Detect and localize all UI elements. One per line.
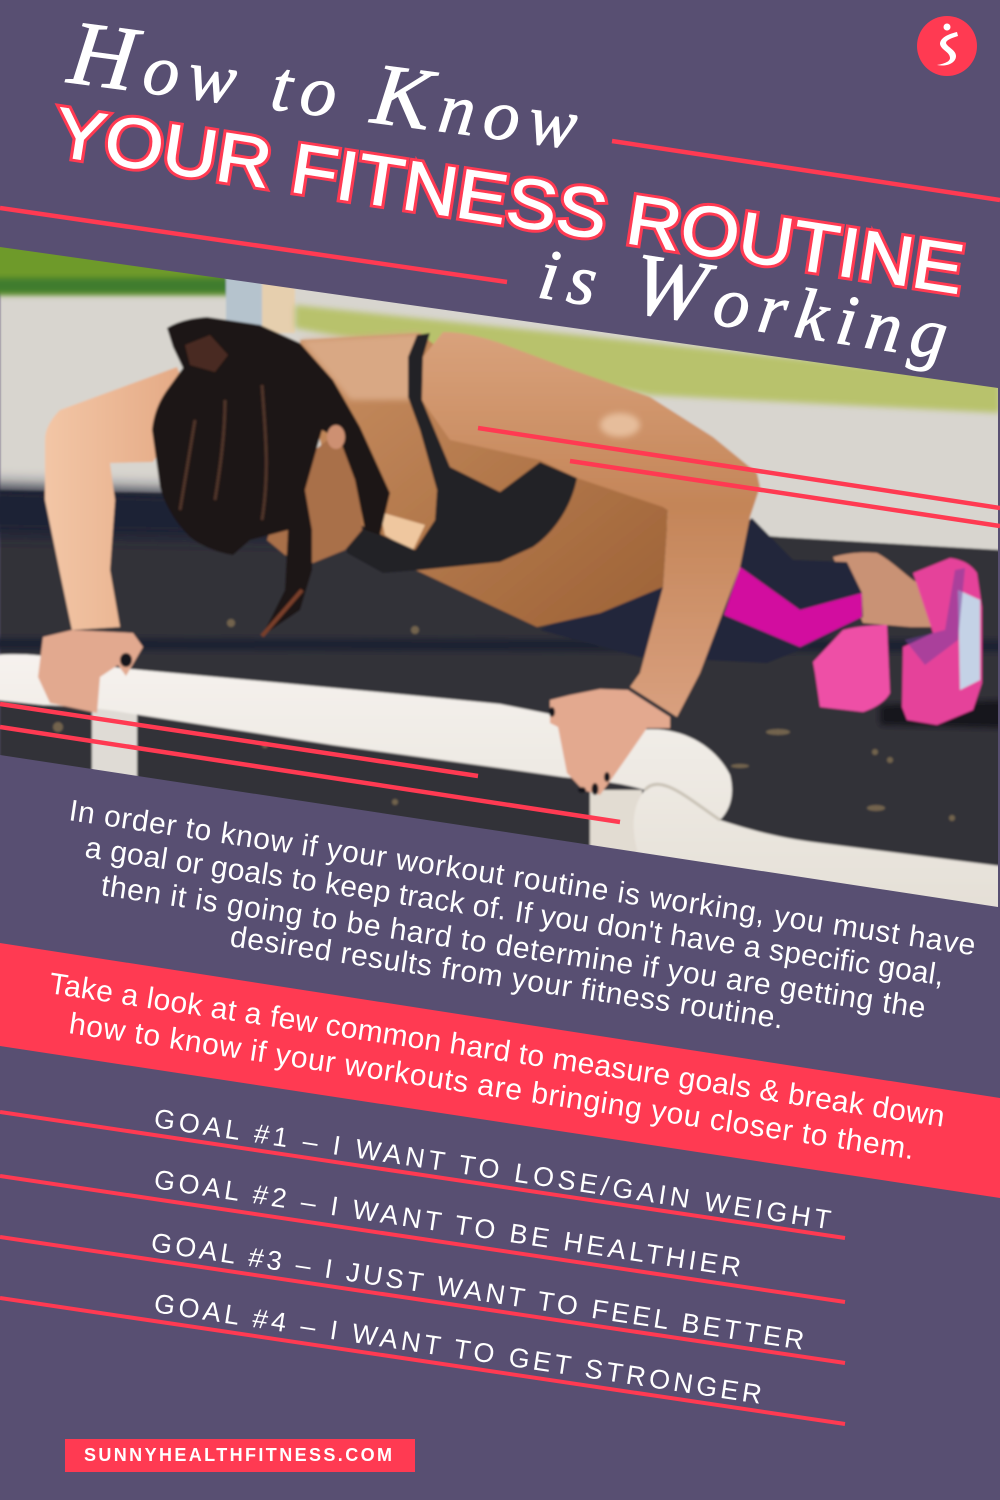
red band text: Take a look at a few common hard to measure goals & break down — [47, 967, 947, 1134]
red band — [0, 943, 1000, 1198]
calf — [833, 552, 947, 627]
red band text: how to know if your workouts are bringing you closer to them. — [67, 1007, 916, 1166]
arm highlight — [600, 413, 640, 437]
title — [50, 1, 969, 379]
goal 1: GOAL #1 – I WANT TO LOSE/GAIN WEIGHT — [152, 1103, 833, 1235]
leggings — [540, 518, 863, 663]
decorative lines — [0, 141, 1000, 822]
website button: SUNNYHEALTHFITNESS.COM — [84, 1445, 392, 1465]
woman: face and neck — [267, 430, 362, 563]
intro paragraph: In order to know if your workout routine is working, you must have — [67, 794, 978, 962]
goal 2 — [0, 1164, 845, 1302]
intro paragraph: a goal or goals to keep track of. If you don't have a specific goal, — [83, 831, 946, 992]
title script line 1: How to Know — [62, 1, 584, 169]
white rail — [0, 654, 1000, 915]
website button — [65, 1439, 415, 1472]
photo background: park and pavement — [0, 235, 1000, 920]
woman: legs, leggings and shoes — [540, 518, 982, 725]
woman: right arm — [422, 332, 760, 717]
woman: hair — [152, 317, 390, 636]
woman: torso — [300, 333, 668, 627]
asphalt speckles — [53, 619, 955, 821]
title script line 2: is Working — [533, 221, 955, 379]
title main line: YOUR FITNESS ROUTINE — [50, 93, 969, 309]
goal 3: GOAL #3 – I JUST WANT TO FEEL BETTER — [149, 1227, 806, 1356]
intro paragraph: desired results from your fitness routine. — [228, 920, 786, 1036]
intro paragraph: then it is going to be hard to determine if you are getting the — [99, 869, 928, 1025]
rear shoe — [902, 558, 982, 725]
goal 2: GOAL #2 – I WANT TO BE HEALTHIER — [152, 1164, 743, 1283]
photo: woman doing push-ups on a rail — [0, 235, 1000, 920]
woman: left arm — [45, 367, 190, 630]
front shoe — [813, 625, 890, 712]
sports bra — [343, 333, 577, 573]
title main line: YOUR FITNESS ROUTINE — [50, 93, 969, 309]
intro paragraph — [67, 794, 978, 1036]
woman: right hand — [549, 689, 670, 795]
woman: left hand — [38, 630, 143, 713]
logo — [917, 16, 977, 76]
goal 4: GOAL #4 – I WANT TO GET STRONGER — [152, 1288, 764, 1410]
goal 4 — [0, 1288, 845, 1424]
goals list — [0, 1103, 845, 1424]
